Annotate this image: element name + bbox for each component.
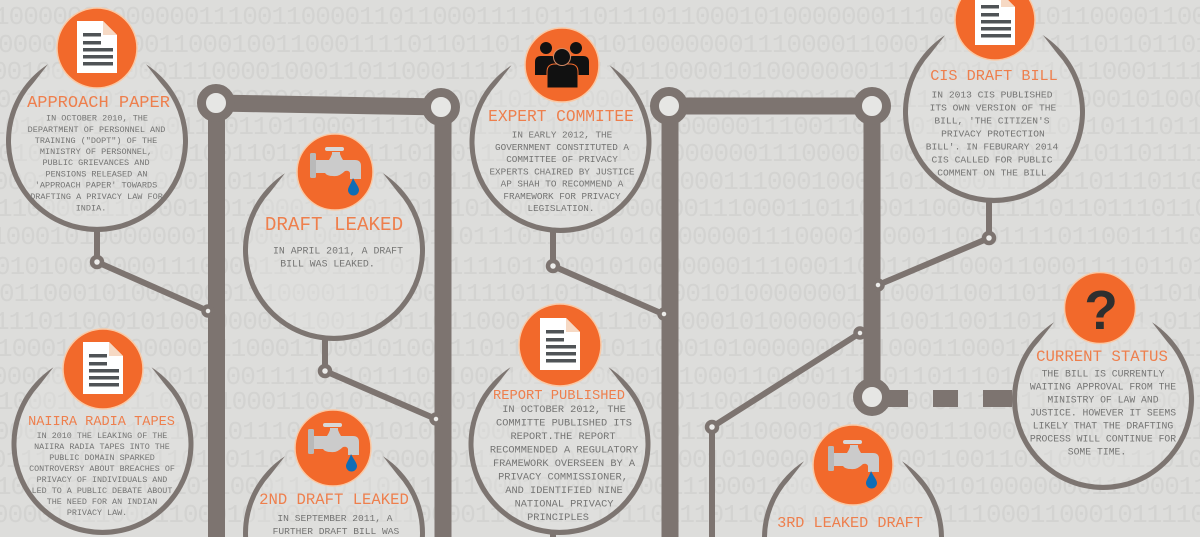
panel: approach paper bbox=[6, 8, 188, 232]
text: 2nd draft leaked body: FURTHER DRAFT BILL WAS bbox=[273, 526, 400, 537]
text: approach paper body: DRAFTING A PRIVACY LAW FOR bbox=[30, 192, 163, 202]
text: draft leaked body bbox=[273, 246, 403, 270]
text: cis draft bill body: IN 2013 CIS PUBLISHED bbox=[932, 90, 1053, 100]
text: cis draft bill body: BILL'. IN FEBURARY 2014 bbox=[926, 142, 1058, 152]
text: current status body: PROCESS WILL CONTINUE FOR bbox=[1030, 434, 1176, 444]
heading: 2nd draft leaked: 2ND DRAFT LEAKED bbox=[259, 491, 409, 509]
text: expert committee body: GOVERNMENT CONSTITUTED A bbox=[495, 142, 629, 153]
text: naiira radia tapes body: NAIIRA RADIA TAPES INTO THE bbox=[34, 442, 170, 452]
text: report published body: PRIVACY COMMISSIONER, bbox=[498, 472, 628, 484]
panel: expert committee bbox=[470, 28, 652, 233]
text: naiira radia tapes body: IN 2010 THE LEAKING OF THE bbox=[37, 431, 167, 441]
text: approach paper body: PENSIONS RELEASED AN bbox=[45, 170, 148, 180]
text: approach paper body: MINISTRY OF PERSONNEL, bbox=[40, 147, 152, 157]
panel: current status bbox=[1012, 272, 1194, 490]
heading: naiira radia tapes: NAIIRA RADIA TAPES bbox=[28, 415, 175, 430]
panel: report published bbox=[468, 304, 650, 535]
text: cis draft bill body: CIS CALLED FOR PUBLIC bbox=[932, 154, 1053, 166]
heading: report published: REPORT PUBLISHED bbox=[493, 389, 625, 404]
icon: people bbox=[525, 28, 599, 102]
panel: cis draft bill bbox=[903, 0, 1085, 203]
heading: approach paper: APPROACH PAPER bbox=[27, 94, 170, 113]
text: report published body: FRAMEWORK OVERSEEN BY A bbox=[493, 458, 636, 470]
text: approach paper body: PUBLIC GRIEVANCES AND bbox=[42, 158, 150, 168]
text: report published body: COMMITTE PUBLISHED ITS bbox=[496, 418, 632, 430]
text: cis draft bill body bbox=[926, 90, 1058, 178]
icon: tap bbox=[295, 410, 371, 486]
text: current status body: MINISTRY OF LAW AND bbox=[1047, 394, 1159, 406]
panel: naiira radia tapes bbox=[11, 329, 193, 535]
panel: 3rd leaked draft bbox=[762, 425, 944, 537]
circuit line: first loop bbox=[202, 88, 456, 537]
text: expert committee body: EXPERTS CHAIRED BY JUSTICE bbox=[489, 166, 635, 178]
heading: expert committee: EXPERT COMMITEE bbox=[488, 108, 634, 126]
heading: current status: CURRENT STATUS bbox=[1036, 348, 1168, 366]
text: naiira radia tapes body: PUBLIC DOMAIN SPARKED bbox=[49, 453, 155, 463]
icon: document bbox=[519, 304, 601, 386]
panel: 2nd draft leaked bbox=[243, 410, 425, 537]
text: current status body: JUSTICE. HOWEVER IT SEEMS bbox=[1030, 408, 1176, 418]
heading: cis draft bill: CIS DRAFT BILL bbox=[930, 67, 1058, 85]
text: current status body: LIKELY THAT THE DRAFTING bbox=[1033, 420, 1173, 432]
text: report published body bbox=[490, 404, 638, 524]
icon: document bbox=[63, 329, 143, 409]
text: expert committee body: AP SHAH TO RECOMMEND A bbox=[501, 178, 624, 190]
heading: draft leaked: DRAFT LEAKED bbox=[265, 214, 403, 236]
text: naiira radia tapes body: PRIVACY OF INDIVIDUALS AND bbox=[37, 475, 167, 485]
text: approach paper body: 'APPROACH PAPER' TOWARDS bbox=[35, 180, 157, 190]
text: cis draft bill body: ITS OWN VERSION OF THE bbox=[930, 102, 1057, 114]
text: approach paper body: TRAINING ("DOPT") OF THE bbox=[35, 136, 157, 146]
branch connectors bbox=[92, 201, 994, 537]
icon: question mark: ? bbox=[1084, 279, 1118, 341]
text: naiira radia tapes body: THE NEED FOR AN INDIAN bbox=[47, 497, 157, 507]
heading: 3rd leaked draft: 3RD LEAKED DRAFT bbox=[777, 514, 923, 532]
text: report published body: AND IDENTIFIED NINE bbox=[505, 485, 623, 497]
text: cis draft bill body: COMMENT ON THE BILL bbox=[937, 168, 1047, 178]
panel: draft leaked bbox=[243, 134, 425, 341]
text: expert committee body: FRAMEWORK FOR PRIVACY bbox=[503, 191, 621, 202]
circuit end with dashes bbox=[858, 382, 1012, 412]
text: report published body: REPORT.THE REPORT bbox=[510, 431, 616, 443]
text: expert committee body: LEGISLATION. bbox=[528, 203, 594, 214]
icon: question mark bbox=[1064, 272, 1136, 344]
text: approach paper body: IN OCTOBER 2010, THE bbox=[46, 114, 148, 124]
text: cis draft bill body: BILL, 'THE CITIZEN'S bbox=[934, 116, 1050, 126]
text: cis draft bill body: PRIVACY PROTECTION bbox=[941, 128, 1045, 140]
text: current status body: SOME TIME. bbox=[1068, 446, 1126, 458]
icon: document bbox=[57, 8, 137, 88]
icon: document bbox=[955, 0, 1035, 60]
icon: tap bbox=[813, 425, 893, 505]
text: expert committee body bbox=[489, 130, 635, 214]
text: approach paper body bbox=[28, 114, 165, 214]
text: expert committee body: COMMITTEE OF PRIVACY bbox=[506, 154, 618, 165]
text: naiira radia tapes body: LED TO A PUBLIC DEBATE ABOUT bbox=[32, 486, 172, 496]
text: current status body bbox=[1030, 368, 1176, 458]
text: report published body: IN OCTOBER 2012, THE bbox=[502, 404, 626, 416]
text: expert committee body: IN EARLY 2012, THE bbox=[512, 130, 613, 140]
circuit line: second loop bbox=[654, 92, 886, 537]
text: draft leaked body: IN APRIL 2011, A DRAFT bbox=[273, 246, 403, 256]
text: report published body: PRINCIPLES bbox=[527, 512, 589, 524]
text: naiira radia tapes body: PRIVACY LAW. bbox=[67, 508, 127, 518]
text: naiira radia tapes body bbox=[29, 431, 175, 518]
text: 2nd draft leaked body bbox=[273, 513, 400, 537]
icon: tap bbox=[297, 134, 373, 210]
text: current status body: THE BILL IS CURRENTLY bbox=[1042, 368, 1165, 380]
text: draft leaked body: BILL WAS LEAKED. bbox=[280, 258, 375, 270]
text: report published body: RECOMMENDED A REGULATORY bbox=[490, 444, 638, 456]
text: approach paper body: DEPARTMENT OF PERSONNEL AND bbox=[28, 125, 165, 135]
text: 2nd draft leaked body: IN SEPTEMBER 2011, A bbox=[277, 513, 393, 524]
text: report published body: NATIONAL PRIVACY bbox=[515, 498, 613, 510]
text: naiira radia tapes body: CONTROVERSY ABOUT BREACHES OF bbox=[29, 464, 175, 474]
text: current status body: WAITING APPROVAL FROM THE bbox=[1030, 382, 1176, 392]
text: approach paper body: INDIA. bbox=[76, 204, 106, 214]
